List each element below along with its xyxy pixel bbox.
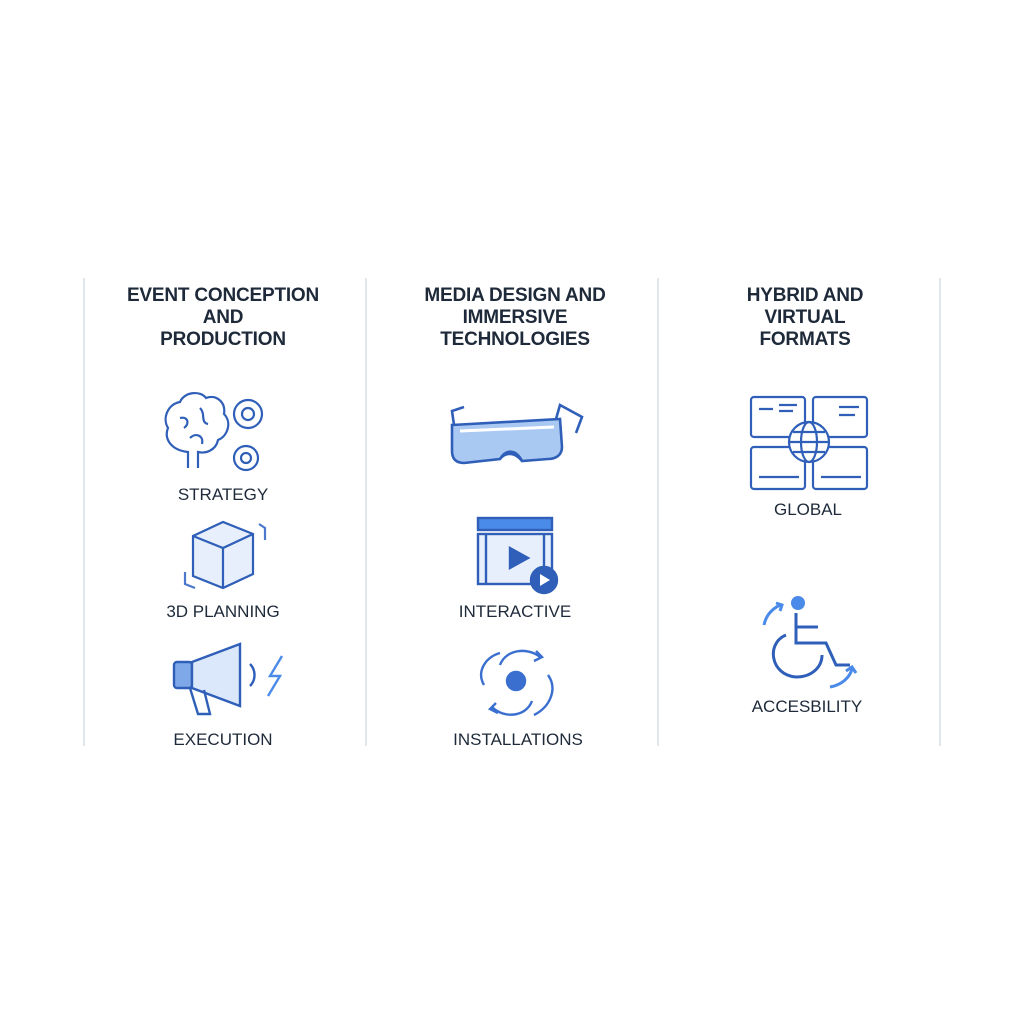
label: execution: EXECUTION bbox=[173, 730, 273, 749]
label: strategy: STRATEGY bbox=[178, 485, 268, 504]
icon: cube bbox=[184, 520, 266, 590]
label: global: GLOBAL bbox=[774, 500, 842, 519]
icon: brain and gears bbox=[164, 392, 264, 472]
heading: event conception: AND bbox=[203, 307, 243, 328]
label: 3d planning: 3D PLANNING bbox=[166, 602, 280, 621]
icon: vr glasses bbox=[450, 403, 584, 464]
heading: hybrid: HYBRID AND bbox=[747, 285, 863, 306]
heading: media design: TECHNOLOGIES bbox=[440, 329, 590, 350]
icon: megaphone bbox=[172, 642, 283, 716]
heading: hybrid bbox=[747, 285, 863, 350]
heading: media design: MEDIA DESIGN AND bbox=[424, 285, 606, 306]
icon: clapperboard bbox=[476, 516, 558, 594]
heading: hybrid: FORMATS bbox=[759, 329, 851, 350]
label: installations: INSTALLATIONS bbox=[453, 730, 583, 749]
heading: media design bbox=[424, 285, 606, 350]
heading: event conception bbox=[127, 285, 319, 350]
icon: swirl bbox=[480, 650, 554, 716]
heading: event conception: EVENT CONCEPTION bbox=[127, 285, 319, 306]
label: accessibility: ACCESBILITY bbox=[752, 697, 862, 716]
label: interactive: INTERACTIVE bbox=[459, 602, 571, 621]
heading: hybrid: VIRTUAL bbox=[765, 307, 845, 328]
heading: media design: IMMERSIVE bbox=[463, 307, 567, 328]
heading: event conception: PRODUCTION bbox=[160, 329, 286, 350]
icon: wheelchair bbox=[762, 596, 858, 688]
icon: screens with globe bbox=[750, 396, 868, 490]
